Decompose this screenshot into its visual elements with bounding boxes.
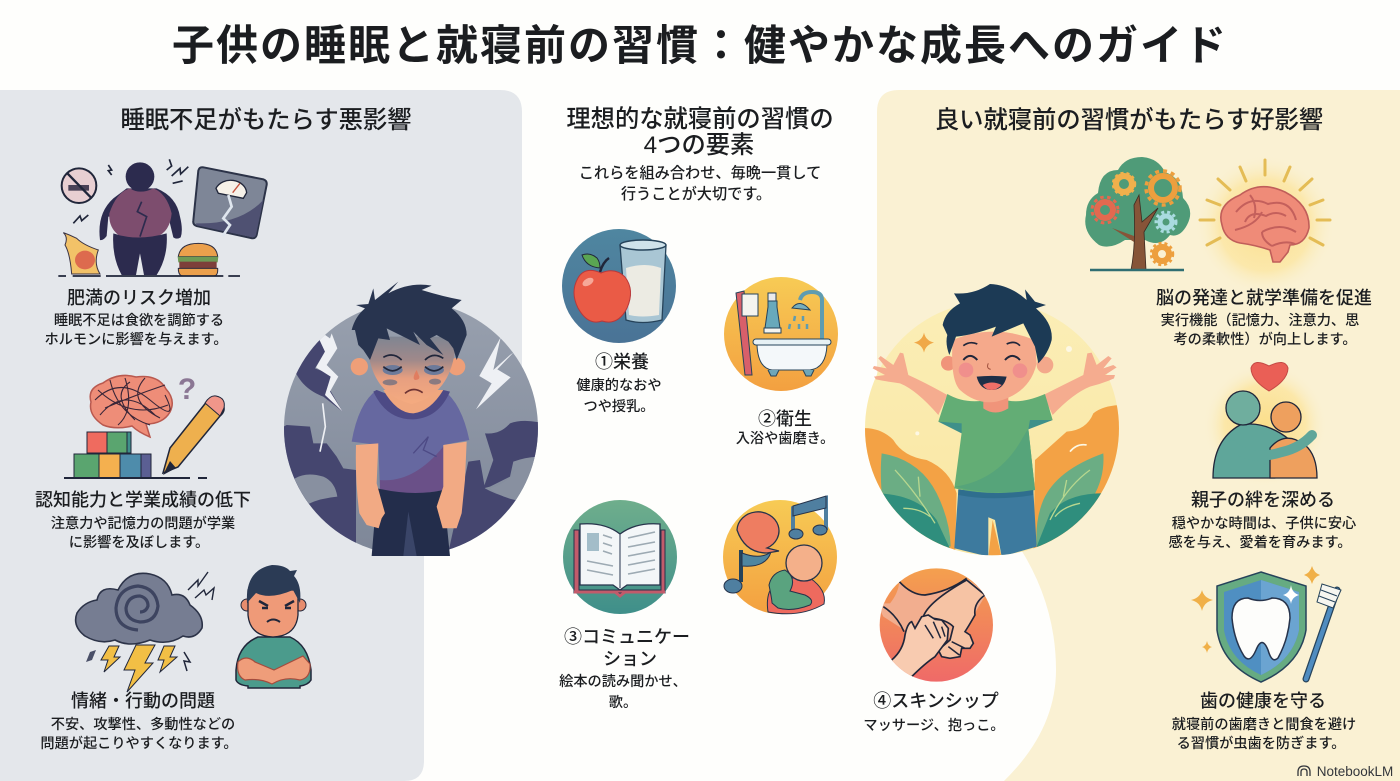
heading: ideal bedtime routine: 4つの要素 — [644, 132, 754, 159]
watermark: NotebookLM: NotebookLM — [1317, 764, 1393, 779]
text block: dental health — [1172, 691, 1356, 752]
icon: cognition: ? — [178, 373, 196, 406]
text block: brain development: 実行機能（記憶力、注意力、思 — [1161, 312, 1359, 329]
text block: communication — [559, 627, 690, 711]
text block: nutrition — [576, 352, 662, 415]
icon: glowing brain — [1195, 155, 1335, 295]
text block: obesity — [44, 288, 228, 348]
text block: cognition — [35, 490, 251, 551]
illustration: happy child — [860, 284, 1123, 560]
icon: tree with gears — [1085, 157, 1190, 270]
title: 子供の睡眠と就寝前の習慣：健やかな成長へのガイド — [172, 22, 1226, 69]
icon: shield tooth and toothbrush — [1191, 566, 1341, 682]
text block: hygiene: ②衛生 — [758, 409, 812, 429]
text block: skin contact: マッサージ、抱っこ。 — [863, 718, 1005, 734]
heading: negative effects: 睡眠不足がもたらす悪影響 — [120, 107, 412, 134]
text block: obesity: 睡眠不足は食欲を調節する — [54, 312, 224, 329]
text block: brain development — [1156, 288, 1372, 348]
text block: parent child bond: 穏やかな時間は、子供に安心 — [1172, 516, 1356, 532]
text block: communication: 歌。 — [609, 695, 637, 711]
heading: ideal bedtime routine: 行うことが大切です。 — [621, 185, 771, 203]
text block: brain development: 考の柔軟性）が向上します。 — [1173, 331, 1357, 348]
text block: hygiene — [736, 409, 834, 447]
text block: communication: ③コミュニケー — [564, 627, 690, 647]
heading: ideal bedtime routine — [566, 106, 834, 203]
text block: parent child bond: 親子の絆を深める — [1191, 490, 1335, 510]
icon: angry child — [236, 565, 311, 688]
illustration: tired sad child — [280, 282, 543, 560]
text block: cognition: に影響を及ぼします。 — [69, 535, 209, 551]
text block: obesity: ホルモンに影響を与えます。 — [44, 332, 228, 348]
text block: nutrition: 健康的なおや — [576, 377, 662, 394]
icon: obesity — [58, 159, 267, 276]
text block: communication: ション — [603, 649, 657, 669]
text block: skin contact — [863, 691, 1005, 734]
text block: communication: 絵本の読み聞かせ、 — [559, 673, 687, 690]
text block: cognition: 注意力や記憶力の問題が学業 — [51, 515, 235, 532]
panel: negative effects background — [0, 90, 522, 781]
text block: emotional issues — [40, 691, 238, 752]
heading: positive effects: 良い就寝前の習慣がもたらす好影響 — [935, 107, 1323, 134]
icon: nutrition — [562, 229, 676, 343]
icon: storm cloud — [76, 572, 214, 692]
text block: parent child bond — [1168, 490, 1356, 551]
text block: brain development: 脳の発達と就学準備を促進 — [1156, 288, 1372, 308]
text block: emotional issues: 情緒・行動の問題 — [71, 691, 215, 711]
text block: cognition: 認知能力と学業成績の低下 — [35, 490, 251, 510]
text block: dental health: 歯の健康を守る — [1200, 691, 1326, 711]
text block: hygiene: 入浴や歯磨き。 — [736, 430, 834, 447]
panel: positive effects background — [877, 90, 1400, 781]
heading: ideal bedtime routine: これらを組み合わせ、毎晩一貫して — [579, 165, 821, 182]
text block: dental health: る習慣が虫歯を防ぎます。 — [1177, 735, 1345, 752]
text block: nutrition: つや授乳。 — [584, 399, 654, 415]
icon: communication — [563, 500, 677, 614]
text block: skin contact: ④スキンシップ — [873, 691, 999, 711]
text block: emotional issues: 不安、攻撃性、多動性などの — [51, 716, 235, 733]
heading: ideal bedtime routine: 理想的な就寝前の習慣の — [566, 106, 834, 133]
icon: cognition — [64, 373, 224, 478]
text block: emotional issues: 問題が起こりやすくなります。 — [40, 735, 238, 752]
text block: parent child bond: 感を与え、愛着を育みます。 — [1168, 534, 1352, 551]
icon: hygiene — [724, 277, 838, 391]
icon: parent child hug — [1203, 362, 1327, 487]
icon: singing and hugging — [723, 496, 837, 614]
icon: skin contact — [877, 568, 993, 687]
text block: dental health: 就寝前の歯磨きと間食を避け — [1172, 716, 1356, 733]
text block: nutrition: ①栄養 — [595, 352, 649, 372]
text block: obesity: 肥満のリスク増加 — [67, 288, 211, 308]
